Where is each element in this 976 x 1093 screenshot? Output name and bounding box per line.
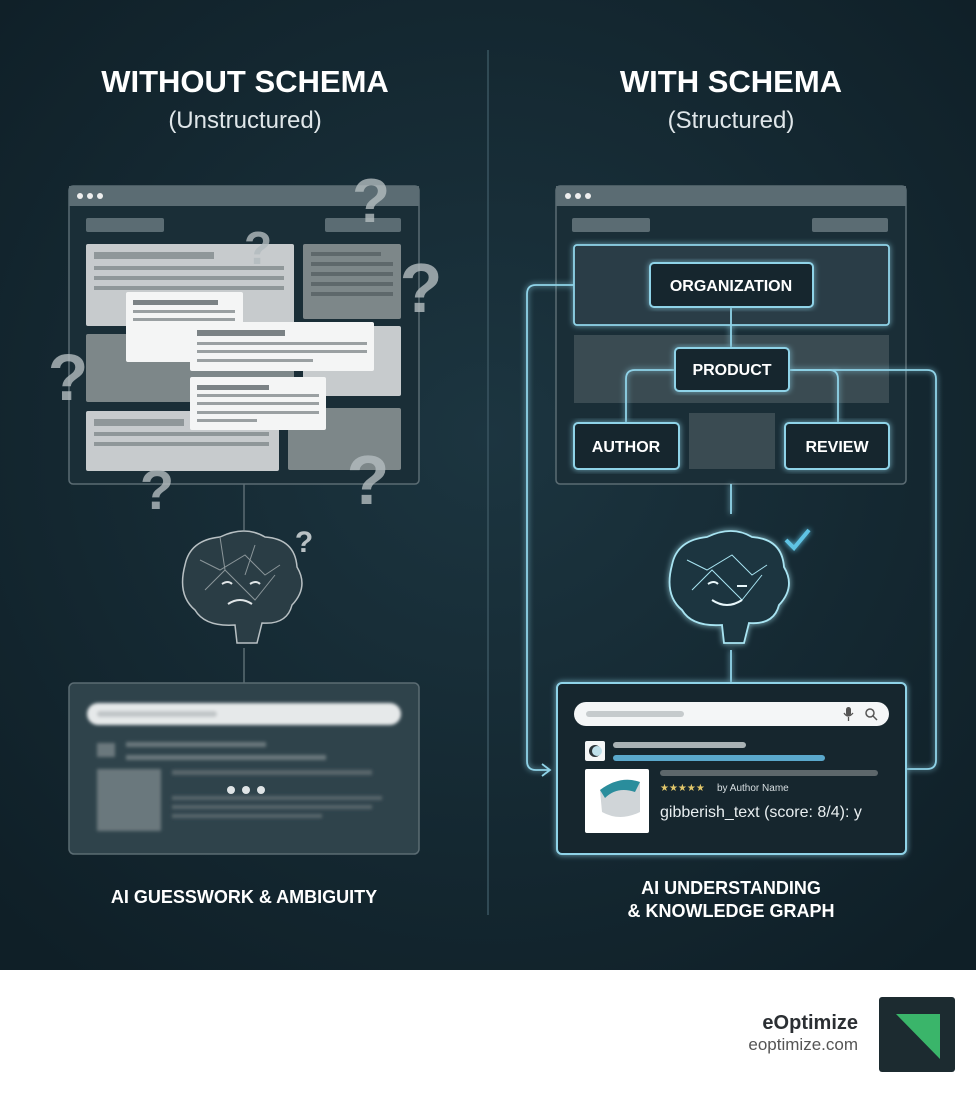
title: with schema (620, 64, 842, 134)
title: without schema: WITHOUT SCHEMA (101, 64, 389, 99)
node: review (785, 423, 889, 469)
node: author: AUTHOR (592, 439, 661, 456)
icon: question marks (48, 167, 442, 521)
caption: right (628, 878, 834, 921)
knowledge graph connectors (527, 245, 936, 770)
node: review: REVIEW (805, 439, 869, 456)
node: product: PRODUCT (692, 362, 772, 379)
icon: question marks: ? (347, 441, 389, 519)
caption: right: AI UNDERSTANDING (641, 878, 821, 898)
icon: question marks: ? (400, 249, 442, 327)
title: without schema (101, 64, 389, 134)
icon: confused brain (183, 531, 302, 643)
caption: left: AI GUESSWORK & AMBIGUITY (111, 887, 377, 907)
icon: question marks: ? (244, 222, 272, 274)
icon: question marks: ? (352, 167, 390, 236)
icon: question marks: ? (140, 458, 174, 521)
icon: happy brain with check (670, 530, 809, 643)
footer brand: eoptimize.com (748, 1035, 858, 1054)
overlapping cards (126, 292, 374, 430)
panel: right search result (557, 683, 906, 854)
footer brand: eOptimize (762, 1012, 858, 1034)
panel: right search result: ★★★★★ (660, 783, 705, 794)
title: with schema: (Structured) (668, 107, 794, 134)
node: organization (650, 263, 813, 307)
panel: left search result (blurred) (69, 683, 419, 854)
node: product (675, 348, 789, 391)
title: with schema: WITH SCHEMA (620, 64, 842, 99)
text: ? (295, 526, 313, 559)
icon: question marks: ? (48, 340, 88, 414)
node: author (574, 423, 679, 469)
panel: right browser (556, 186, 906, 484)
footer brand (748, 997, 955, 1072)
node: organization: ORGANIZATION (670, 278, 792, 295)
title: without schema: (Unstructured) (168, 107, 322, 134)
panel: right search result: by Author Name (717, 783, 789, 794)
caption: right: & KNOWLEDGE GRAPH (628, 901, 834, 921)
panel: right search result: gibberish_text (score: 8/4): y (660, 804, 862, 821)
panel: left browser (69, 186, 419, 484)
